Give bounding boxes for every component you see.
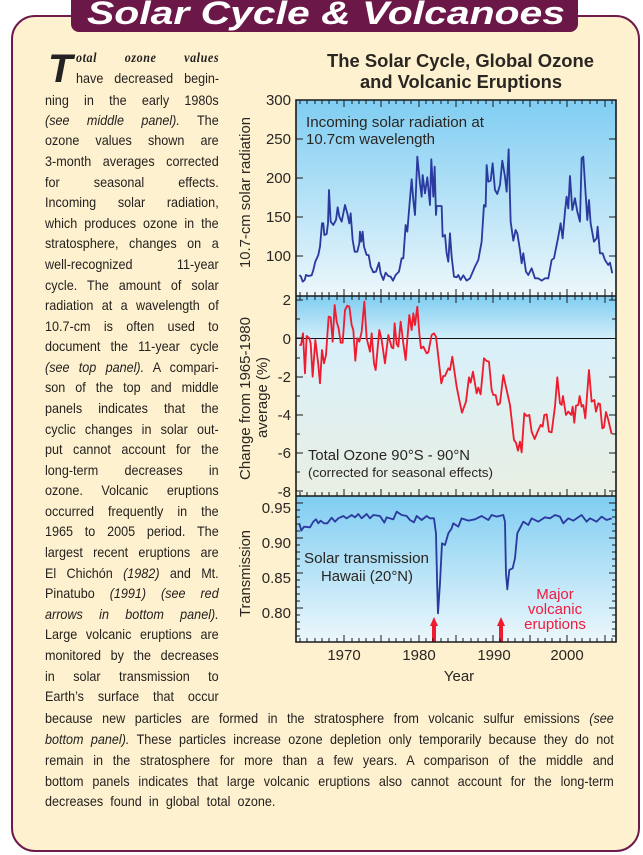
transmission label: Solar transmission	[304, 551, 429, 567]
text block: left column: 1965 to 2005 period. The	[45, 523, 219, 539]
chart title: and Volcanic Eruptions	[360, 72, 562, 92]
text block: left column: El Chichón (1982) and Mt.	[45, 565, 219, 581]
text block: bottom full-width paragraph: decreases found in global total ozone.	[45, 793, 275, 809]
ozone y axis	[238, 292, 291, 501]
ozone y axis: Change from 1965-1980	[238, 317, 254, 480]
x axis labels: 1970	[327, 647, 361, 664]
text block: left column: document the 11-year cycle	[45, 338, 219, 354]
text block: left column: in solar transmission to	[45, 668, 219, 684]
ozone line	[299, 302, 612, 452]
text block: left column: ozone values shown are	[45, 132, 219, 148]
ozone label	[308, 448, 493, 480]
transmission y axis: 0.80	[262, 605, 291, 622]
text block: left column: Incoming solar radiation,	[45, 194, 219, 210]
frames and tick marks	[296, 100, 616, 642]
solar y axis: 100	[266, 248, 291, 265]
x axis labels	[327, 647, 584, 685]
text block: left column: ning in the early 1980s	[45, 92, 219, 108]
solar radiation label: Incoming solar radiation at	[306, 115, 484, 131]
solar y axis	[238, 92, 291, 268]
transmission y axis: 0.90	[262, 535, 291, 552]
panel: ozone change	[238, 292, 616, 501]
ozone y axis: 0	[283, 331, 291, 348]
text block: left column: well-recognized 11-year	[45, 256, 219, 272]
x axis labels: 2000	[550, 647, 584, 664]
text block: left column: cycle. The amount of solar	[45, 277, 219, 293]
text block: bottom full-width paragraph: bottom panels indicates that large volcanic eruptions also cannot account for the long-term	[45, 773, 614, 789]
solar y axis: 250	[266, 131, 291, 148]
solar y axis: 10.7-cm solar radiation	[238, 117, 254, 268]
text block: left column: Earth’s surface that occur	[45, 688, 219, 704]
panel: solar transmission	[238, 496, 616, 642]
x axis labels: 1980	[402, 647, 436, 664]
transmission y axis: 0.85	[262, 570, 291, 587]
solar radiation label: 10.7cm wavelength	[306, 132, 435, 148]
ozone y axis: -4	[278, 407, 291, 424]
major eruptions label: Major	[536, 586, 574, 603]
text block: bottom full-width paragraph: remain in the stratosphere for more than a few years. A comparison of the middle and	[45, 752, 614, 768]
text block: left column: largest recent eruptions are	[45, 544, 219, 560]
red arrows: eruptions	[430, 617, 505, 642]
solar radiation label	[306, 115, 484, 148]
text block: left column: panels indicates that the	[45, 400, 219, 416]
ozone y axis: -6	[278, 445, 291, 462]
text block: left column: 3-month averages corrected	[45, 153, 219, 169]
text block: bottom full-width paragraph	[45, 710, 614, 809]
ozone y axis: average (%)	[255, 357, 271, 438]
ozone y axis: -8	[278, 484, 291, 501]
transmission label	[304, 551, 429, 585]
text block: left column: which produces ozone in the	[45, 215, 219, 231]
text block: left column: stratosphere, changes on a	[45, 235, 219, 251]
drop cap T: T	[48, 47, 72, 91]
text block: left column: arrows in bottom panel).	[45, 606, 219, 622]
major eruptions label: volcanic	[528, 601, 583, 618]
transmission y axis: Transmission	[238, 530, 254, 617]
major eruptions label	[524, 586, 586, 633]
ozone label: Total Ozone 90°S - 90°N	[308, 448, 470, 464]
ozone label: (corrected for seasonal effects)	[308, 466, 493, 480]
solar y axis: 300	[266, 92, 291, 109]
text block: left column: put cannot account for the	[45, 441, 219, 457]
text block: left column: occurred frequently in the	[45, 503, 219, 519]
ozone y axis: 2	[283, 292, 291, 309]
solar y axis: 150	[266, 209, 291, 226]
text block: left column: son of the top and middle	[45, 379, 219, 395]
text block: left column: (see top panel). A compari-	[45, 359, 219, 375]
transmission y axis: 0.95	[262, 500, 291, 517]
panel: solar radiation	[238, 92, 616, 296]
text block: left column: Large volcanic eruptions are	[45, 626, 219, 642]
solar radiation line	[299, 149, 612, 282]
text block: left column: for seasonal effects.	[45, 174, 219, 190]
ozone y axis: -2	[278, 369, 291, 386]
text block: left column: 10.7-cm is often used to	[45, 318, 219, 334]
text block: left column: radiation at a wavelength of	[45, 297, 219, 313]
transmission y axis	[238, 500, 291, 622]
text block: left column: (see middle panel). The	[45, 112, 219, 128]
text block: bottom full-width paragraph: bottom panel). These particles increase ozone depletion only temporarily because they do not	[45, 731, 614, 747]
x axis title: Year	[444, 668, 474, 685]
transmission label: Hawaii (20°N)	[321, 569, 413, 585]
text block: left column: long-term decreases in	[45, 462, 219, 478]
text block: left column: cyclic changes in solar out-	[45, 421, 219, 437]
text block: left column: monitored by the decreases	[45, 647, 219, 663]
x axis labels: 1990	[477, 647, 511, 664]
text block: left column	[45, 47, 220, 704]
solar y axis: 200	[266, 170, 291, 187]
chart title	[327, 51, 594, 92]
text block: left column: have decreased begin-	[76, 70, 219, 86]
text block: left column: Pinatubo (1991) (see red	[45, 585, 219, 601]
text block: bottom full-width paragraph: because new particles are formed in the stratosphere from volcanic sulfur emissions (see	[45, 710, 614, 726]
text block: left column: otal ozone values	[76, 50, 219, 65]
text block: left column: ozone. Volcanic eruptions	[45, 482, 219, 498]
chart title: The Solar Cycle, Global Ozone	[327, 51, 594, 71]
major eruptions label: eruptions	[524, 616, 586, 633]
transmission line	[299, 512, 612, 613]
